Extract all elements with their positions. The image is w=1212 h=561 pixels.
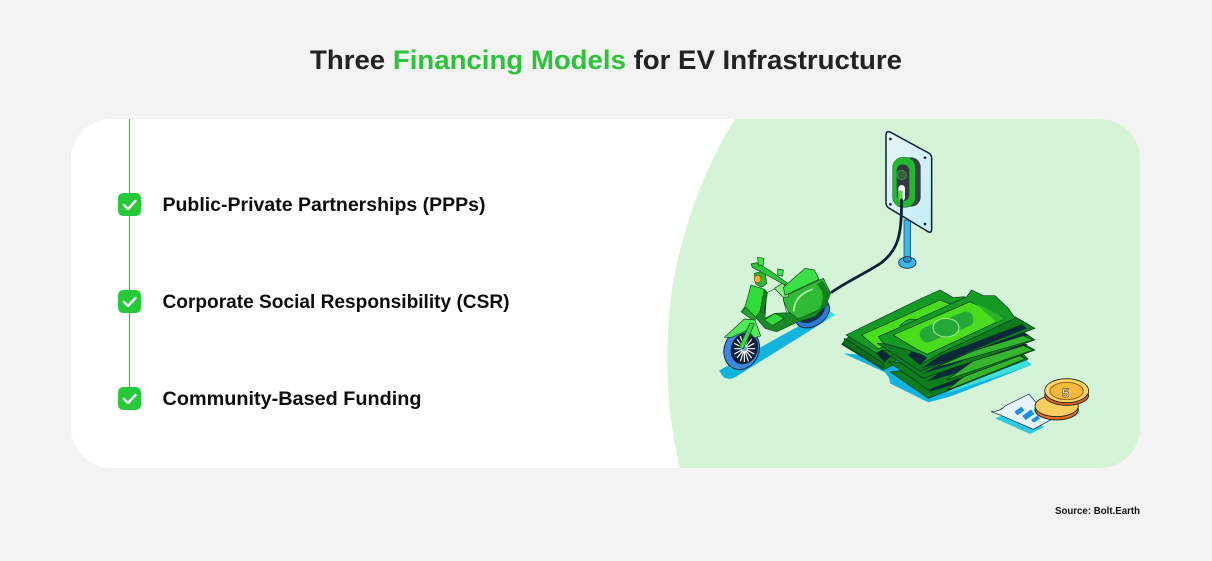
sub: top note — [878, 290, 1015, 365]
charging cable — [832, 200, 902, 292]
panel: financing models card — [71, 119, 1140, 468]
icon: electric scooter — [718, 257, 835, 379]
icon: stack of banknotes — [842, 290, 1035, 402]
source note: Source: Bolt.Earth — [1055, 506, 1140, 517]
timeline line — [128, 119, 130, 398]
list item: Community-Based Funding: Community-Based Funding — [162, 388, 422, 410]
title: Three Financing Models for EV Infrastructure — [310, 45, 902, 75]
sub: lower note layers — [877, 317, 1035, 398]
list item: Corporate Social Responsibility: Corporate Social Responsibility (CSR) — [162, 291, 510, 313]
icon: document and coins — [991, 379, 1089, 434]
panel: green illustration background — [667, 119, 1140, 468]
icon: wall charger on post — [886, 132, 932, 268]
list item: Public-Private Partnerships: Public-Private Partnerships (PPPs) — [162, 194, 486, 216]
icon: document and coins: 5 — [1062, 385, 1070, 400]
